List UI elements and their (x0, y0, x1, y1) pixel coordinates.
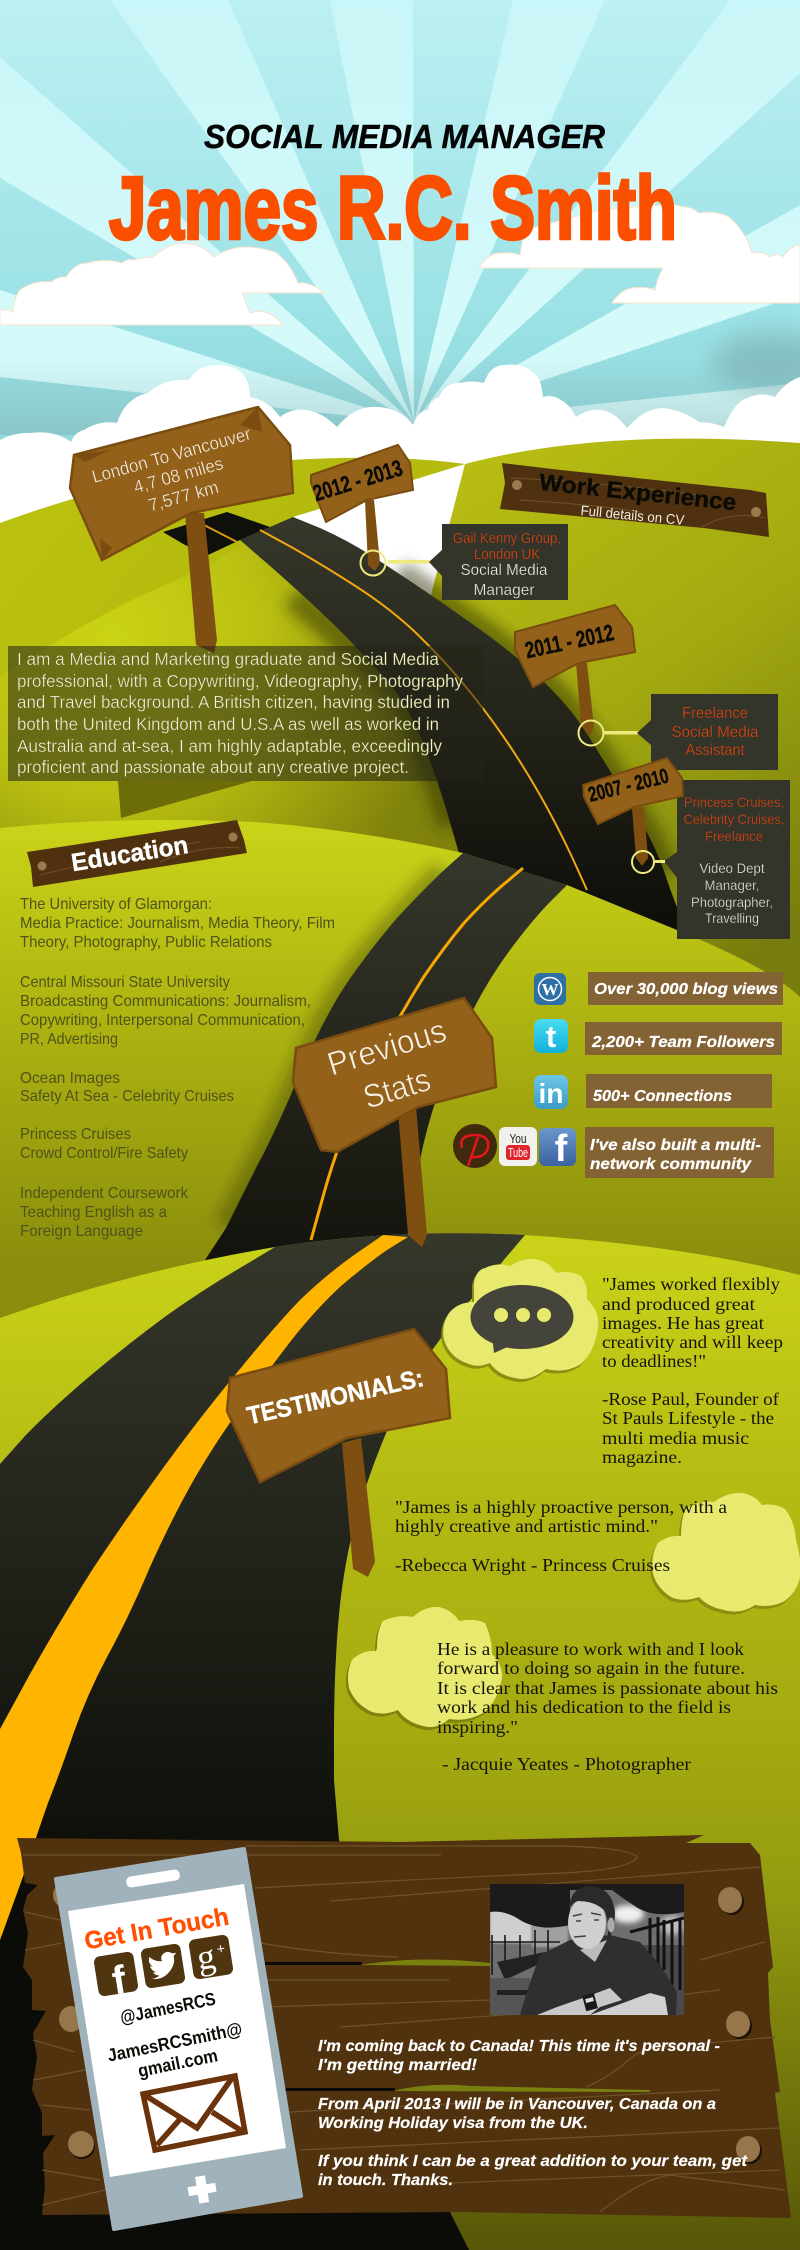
education list: Media Practice: Journalism, Media Theory, Film (20, 915, 335, 932)
sign: London to Vancouver: 7,577 km (146, 477, 221, 516)
banner: Work Experience (500, 463, 769, 537)
education list: The University of Glamorgan: (20, 896, 212, 913)
photo: portrait of James (490, 1884, 684, 2015)
testimonial: Rose Paul (602, 1274, 783, 1467)
callout: Gail Kenny Group: Social Media (460, 562, 548, 579)
testimonial: Jacquie Yeates (437, 1639, 778, 1774)
bio text panel: both the United Kingdom and U.S.A as well as worked in (17, 714, 439, 734)
stat: blog views (588, 972, 783, 1005)
bio text panel: and Travel background. A British citizen, having studied in (17, 692, 450, 712)
callout: Gail Kenny Group (429, 524, 568, 600)
testimonial: Jacquie Yeates: inspiring." (437, 1717, 518, 1737)
callout: Princess Cruises: Celebrity Cruises, (684, 811, 784, 827)
sign: Previous Stats: Stats (359, 1060, 435, 1116)
road: foreground (0, 1233, 525, 2250)
callout: Princess Cruises: Travelling (705, 910, 759, 926)
icon: google plus square: g (194, 1936, 218, 1978)
bio text panel: I am a Media and Marketing graduate and Social Media (17, 649, 439, 669)
timeline marker 2011 (578, 720, 638, 746)
hill: right background (300, 439, 800, 1100)
sign: 2011 - 2012: 2011 - 2012 (523, 619, 616, 663)
sign: 2012 - 2013 (310, 445, 413, 571)
education list: Theory, Photography, Public Relations (20, 934, 272, 951)
board text: I'm coming back to Canada! This time it's personal - (318, 2038, 720, 2055)
testimonial: Rose Paul: and produced great (602, 1294, 755, 1314)
cloud: upper left (0, 243, 324, 325)
stat: followers (585, 1022, 782, 1055)
timeline marker 2007 (632, 851, 665, 873)
wooden board panel (17, 1835, 791, 2218)
road: far black section (163, 512, 270, 555)
icon: Facebook (539, 1128, 576, 1170)
testimonial: Rose Paul: -Rose Paul, Founder of (602, 1389, 779, 1409)
callout: Freelance Social Media Assistant: Social Media (672, 724, 759, 741)
hill: left front ridge (0, 517, 680, 940)
education list: Foreign Language (20, 1223, 143, 1240)
road: upper curve with centre line (240, 517, 700, 960)
banner: Work Experience: Full details on CV (580, 502, 686, 528)
banner: Education: Education (69, 831, 190, 877)
cloud: upper right (479, 204, 800, 303)
get in touch heading: Get In Touch (82, 1903, 231, 1956)
sign: 2011 - 2012 (515, 605, 635, 737)
bio text panel: professional, with a Copywriting, Videography, Photography (17, 671, 463, 691)
icon: facebook square: f (109, 1958, 130, 2003)
education list: Independent Coursework (20, 1185, 189, 1202)
sign: 2007 - 2010 (583, 758, 683, 866)
sign: Previous Stats: Previous (323, 1011, 450, 1083)
testimonial: Rebecca Wright (395, 1497, 727, 1575)
board text: in touch. Thanks. (318, 2172, 453, 2189)
education list: PR, Advertising (20, 1031, 118, 1048)
middle road soft shadow (226, 871, 443, 1228)
road: yellow stripe (0, 1235, 408, 1940)
icon: WordPress (534, 973, 566, 1005)
board text: I'm getting married! (318, 2057, 478, 2074)
stat: connections (586, 1074, 772, 1108)
sign: London to Vancouver: 4,7 08 miles (131, 453, 225, 497)
subtitle: SOCIAL MEDIA MANAGER (204, 118, 605, 155)
banner: Education (27, 820, 247, 887)
testimonial: Rose Paul: "James worked flexibly (602, 1274, 780, 1294)
icon: google plus square: + (215, 1940, 226, 1957)
sign: London to Vancouver (70, 407, 293, 653)
board text: From April 2013 I will be in Vancouver, Canada on a (318, 2096, 716, 2113)
stat: multi-network community (585, 1127, 774, 1178)
callout: Gail Kenny Group: Gail Kenny Group, (453, 530, 561, 547)
testimonial: Rose Paul: St Pauls Lifestyle - the (602, 1408, 774, 1428)
sign: London to Vancouver: London To Vancouver (90, 424, 253, 487)
hill: testimonials (0, 1233, 800, 2250)
education list (20, 896, 335, 1240)
sign: Previous Stats (293, 998, 496, 1247)
cloud: lower left (346, 1607, 502, 1730)
contact details (106, 1989, 244, 2081)
board text: If you think I can be a great addition to your team, get (318, 2153, 748, 2170)
board nails (53, 1883, 762, 2164)
testimonial: Rose Paul: creativity and will keep (602, 1332, 783, 1352)
testimonial: Jacquie Yeates: He is a pleasure to work with and I look (437, 1639, 744, 1659)
timeline marker 2012 (360, 550, 430, 576)
stat: multi-network community: network community (590, 1156, 752, 1173)
icon: LinkedIn (534, 1075, 568, 1109)
bio text panel: proficient and passionate about any creative project. (17, 757, 409, 777)
callout: Princess Cruises: Video Dept (700, 860, 765, 876)
callout: Princess Cruises: Freelance (705, 828, 763, 844)
callout: Princess Cruises (664, 780, 790, 939)
stat: followers: 2,200+ Team Followers (591, 1034, 775, 1051)
education list: Crowd Control/Fire Safety (20, 1145, 188, 1162)
education list: Central Missouri State University (20, 974, 230, 991)
contact details: gmail.com (136, 2045, 219, 2081)
road: middle curve with centre line (205, 853, 567, 1260)
contact details: @JamesRCS (118, 1989, 217, 2028)
icon: WordPress: W (542, 980, 558, 999)
bio text panel: Australia and at-sea, I am highly adaptable, exceedingly (17, 736, 442, 756)
icon: facebook square (93, 1951, 140, 2006)
cloud: middle right (650, 1493, 800, 1615)
education list: Teaching English as a (20, 1204, 167, 1221)
banner: Work Experience: Work Experience (538, 469, 738, 515)
callout: Gail Kenny Group: Manager (474, 582, 535, 599)
education list: Broadcasting Communications: Journalism, (20, 993, 311, 1010)
callout: Freelance Social Media Assistant (637, 694, 778, 770)
hill: education (0, 820, 800, 1400)
hill shadow wedge under bio (118, 781, 252, 818)
testimonial: Jacquie Yeates: It is clear that James is passionate about his (437, 1678, 778, 1698)
education list: Copywriting, Interpersonal Communication, (20, 1012, 305, 1029)
callout: Freelance Social Media Assistant: Freelance (682, 705, 748, 722)
testimonial: Rose Paul: to deadlines!" (602, 1351, 706, 1371)
education list: Ocean Images (20, 1070, 120, 1087)
callout: Princess Cruises: Princess Cruises, (684, 794, 784, 810)
icon: Twitter: t (546, 1019, 556, 1054)
testimonial: Rose Paul: multi media music (602, 1428, 749, 1448)
sky sunburst background (0, 0, 800, 520)
phone: contact card (56, 1849, 301, 2229)
sign: 2007 - 2010: 2007 - 2010 (586, 765, 671, 807)
callout: Gail Kenny Group: London UK (474, 546, 540, 563)
cloud with speech bubble icon (441, 1259, 598, 1382)
icon: Pinterest (453, 1124, 497, 1168)
stat: multi-network community: I've also built a multi- (590, 1137, 761, 1154)
sign: Testimonials: TESTIMONIALS: (244, 1364, 426, 1430)
education list: Princess Cruises (20, 1126, 131, 1143)
testimonial: Rebecca Wright: "James is a highly proactive person, with a (395, 1497, 727, 1517)
callout: Freelance Social Media Assistant: Assistant (686, 742, 745, 759)
icon: Facebook: f (555, 1128, 568, 1170)
icon: Twitter (534, 1019, 568, 1054)
testimonial: Rebecca Wright: highly creative and artistic mind." (395, 1516, 658, 1536)
icon: YouTube: Tube (508, 1145, 528, 1160)
contact details: JamesRCSmith@ (106, 2019, 244, 2066)
cloud bank above hills (0, 364, 800, 520)
testimonial: Rose Paul: images. He has great (602, 1313, 764, 1333)
icon: google plus square (188, 1933, 234, 1980)
testimonial: Jacquie Yeates: work and his dedication to the field is (437, 1697, 731, 1717)
testimonial: Rebecca Wright: -Rebecca Wright - Princess Cruises (395, 1555, 670, 1575)
board text: Working Holiday visa from the UK. (318, 2115, 588, 2132)
testimonial: Jacquie Yeates: - Jacquie Yeates - Photographer (442, 1754, 691, 1774)
icon: envelope (143, 2076, 245, 2150)
icon: LinkedIn: in (539, 1078, 563, 1109)
icon: YouTube (499, 1127, 537, 1166)
testimonial: Jacquie Yeates: forward to doing so again in the future. (437, 1658, 745, 1678)
sign: 2012 - 2013: 2012 - 2013 (310, 454, 405, 506)
testimonial: Rose Paul: magazine. (602, 1447, 682, 1467)
stat: blog views: Over 30,000 blog views (594, 981, 778, 998)
callout: Princess Cruises: Manager, (704, 877, 760, 893)
bio text panel (8, 646, 483, 781)
icon: YouTube: You (510, 1131, 526, 1146)
board text (318, 2038, 748, 2189)
callout: Princess Cruises: Photographer, (691, 894, 773, 910)
hill: left background (0, 458, 680, 940)
road soft shadow (293, 573, 665, 874)
stat: connections: 500+ Connections (593, 1088, 732, 1105)
sign: Testimonials (227, 1329, 450, 1577)
icon: twitter square (140, 1943, 186, 1989)
education list: Safety At Sea - Celebrity Cruises (20, 1088, 234, 1105)
